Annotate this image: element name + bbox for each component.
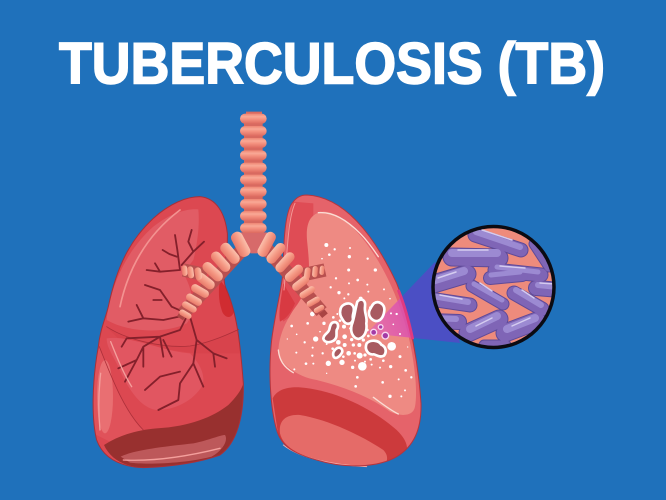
right lung highlights [278, 203, 398, 467]
spots and cavities [287, 243, 412, 398]
bacteria highlights [438, 230, 555, 326]
cavities [323, 300, 386, 358]
bacteria bodies [430, 235, 560, 345]
bacteria light tops [432, 232, 558, 329]
bacteria outlines [430, 235, 560, 345]
magnified bacteria circle [430, 226, 560, 348]
magenta infection area [367, 298, 411, 338]
tracheal rings [240, 114, 267, 233]
bronchial tube core [244, 112, 263, 233]
title: TUBERCULOSIS (TB) [59, 32, 605, 96]
trachea and bronchi [178, 112, 325, 320]
infected purple rings [371, 325, 389, 339]
right bronchus rings [256, 230, 325, 314]
left lung veins [99, 210, 239, 460]
left bronchus rings [178, 230, 252, 320]
left lung [92, 196, 244, 468]
magnification cone [367, 262, 460, 343]
lung edge inside cone [398, 290, 413, 339]
infographic canvas [58, 40, 604, 468]
right lung [270, 194, 422, 468]
